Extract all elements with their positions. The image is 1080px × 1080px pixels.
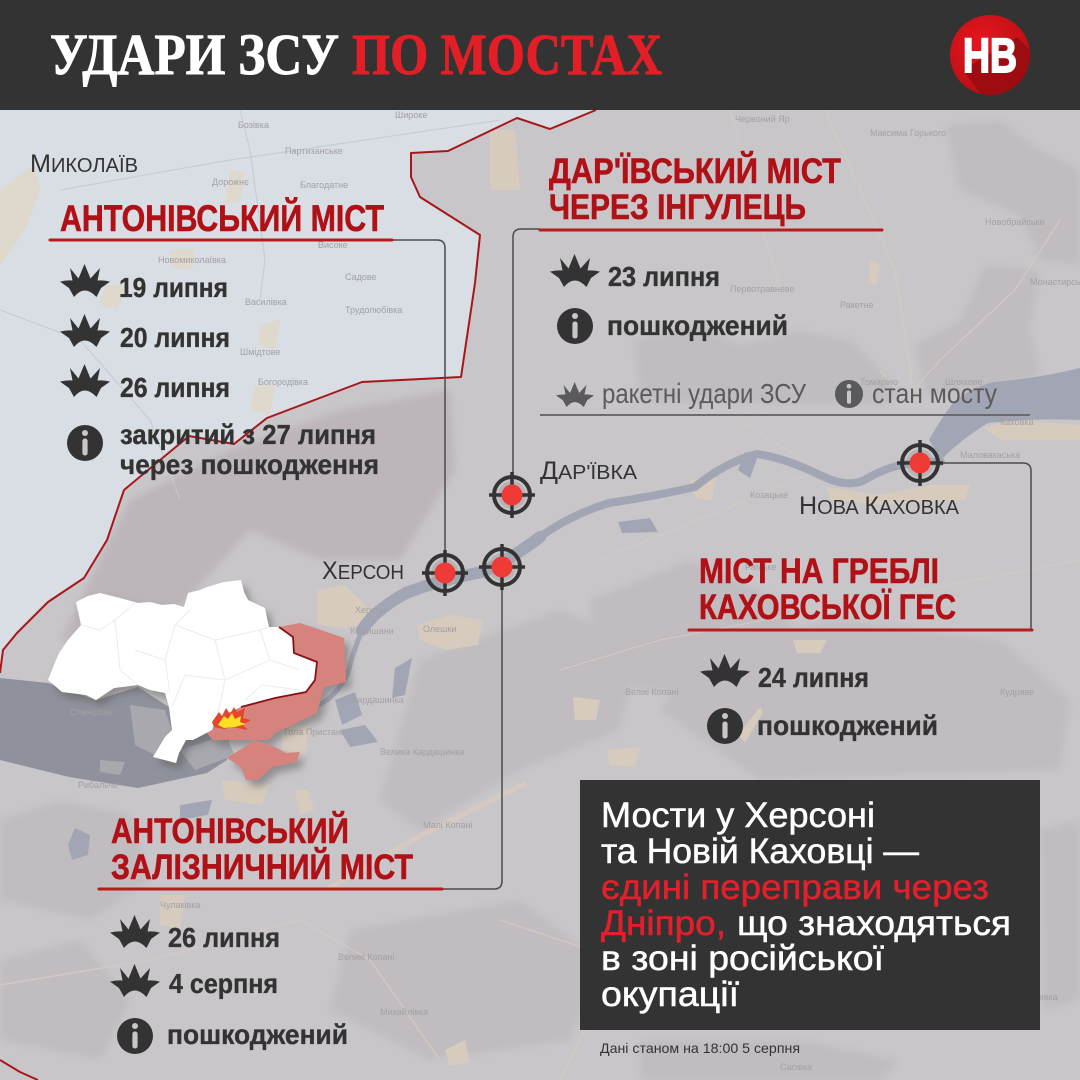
heading: КАХОВСЬКОЇ ГЕС	[699, 588, 956, 627]
map background: Великі Копані	[338, 952, 395, 962]
frontline on inset	[241, 627, 317, 707]
map background: Богородівка	[258, 377, 308, 387]
map background: Велікі Копані	[625, 687, 678, 697]
panel: Darivka bridge: 23 липня	[608, 261, 720, 292]
map background: Каховка	[1000, 417, 1034, 427]
callout: Дніпро,	[601, 904, 726, 943]
map background: Василівка	[245, 297, 287, 307]
map background: Шляхове	[945, 377, 982, 387]
map background: Комишани	[350, 626, 394, 636]
heading: АНТОНІВСЬКИЙ МІСТ	[60, 197, 384, 239]
callout: єдині переправи через	[601, 868, 989, 907]
map background: Олешки	[423, 624, 456, 634]
callout: в зоні російської	[601, 939, 884, 978]
heading	[699, 552, 956, 627]
panel: Darivka bridge	[540, 151, 882, 344]
map background: Чулаківка	[160, 900, 200, 910]
map background: Партизанське	[285, 146, 343, 156]
panel: Kakhovka dam bridge	[689, 552, 1032, 744]
map background: Кардашинка	[352, 695, 404, 705]
map background: Ракетне	[840, 300, 874, 310]
map background: Томаріно	[860, 377, 898, 387]
map background: Маловакаська	[960, 450, 1020, 460]
callout: Мости у Херсоні	[601, 796, 875, 835]
city labels: НОВА КАХОВКА	[799, 492, 960, 520]
city labels	[30, 150, 960, 585]
map background: Новобрайське	[985, 217, 1045, 227]
heading: ЗАЛІЗНИЧНИЙ МІСТ	[111, 847, 413, 887]
map background: Максима Горького	[870, 128, 946, 138]
map background: Новомиколаївка	[158, 255, 226, 265]
map background: Раїське	[745, 562, 776, 572]
map background: Херсон	[355, 605, 386, 615]
panel: Kakhovka dam bridge: 24 липня	[758, 662, 869, 693]
map background: Михайлівка	[380, 1007, 428, 1017]
panel: Antonivskyi rail bridge: 4 серпня	[169, 968, 278, 999]
legend: стан мосту	[872, 378, 997, 409]
map background: Благодатне	[300, 180, 348, 190]
title	[50, 22, 662, 87]
map background: Малі Копані	[423, 820, 472, 830]
panel: Antonivskyi rail bridge	[99, 811, 442, 1054]
map background: Гола Пристань	[284, 727, 346, 737]
panel: Antonivskyi bridge: 19 липня	[119, 272, 228, 303]
city labels: ХЕРСОН	[322, 557, 404, 585]
map background: Первотравневе	[730, 284, 795, 294]
leader lines	[392, 229, 1031, 889]
water: Dnipro-Bug liman	[0, 678, 230, 788]
map background: Бозівка	[238, 120, 269, 130]
city labels: МИКОЛАЇВ	[30, 150, 138, 178]
footnote: Дані станом на 18:00 5 серпня	[600, 1040, 800, 1056]
panel: Antonivskyi bridge: через пошкодження	[120, 449, 379, 480]
panel: Darivka bridge: пошкоджений	[607, 310, 788, 341]
panel: Antonivskyi rail bridge: 26 липня	[168, 922, 280, 953]
map background: Шмідтове	[240, 347, 280, 357]
callout	[580, 780, 1040, 1030]
header bar	[0, 0, 1080, 110]
legend	[540, 378, 1030, 415]
panel: Antonivskyi bridge: 20 липня	[120, 322, 230, 353]
callout: та Новій Каховці —	[601, 832, 919, 871]
water: Dnipro river	[290, 454, 941, 722]
panel: Antonivskyi bridge	[50, 197, 392, 480]
panel: Antonivskyi bridge: 26 липня	[120, 372, 230, 403]
heading: АНТОНІВСЬКИЙ	[111, 811, 349, 851]
map background: Дорожнє	[212, 177, 249, 187]
target markers	[422, 440, 943, 596]
heading: МІСТ НА ГРЕБЛІ	[699, 552, 939, 591]
legend: ракетні удари ЗСУ	[602, 378, 806, 409]
panel: Antonivskyi rail bridge: пошкоджений	[167, 1019, 348, 1050]
map background: Макарівка	[1015, 992, 1058, 1002]
title: ПО МОСТАХ	[352, 22, 662, 87]
map background: Кудряве	[1000, 687, 1034, 697]
title: УДАРИ ЗСУ	[50, 22, 339, 87]
free territory	[0, 110, 596, 673]
map background: Широке	[395, 110, 427, 120]
heading: ЧЕРЕЗ ІНГУЛЕЦЬ	[549, 188, 806, 227]
frontline border	[0, 110, 596, 1080]
map background: Велика Кардашинка	[380, 747, 464, 757]
explosion	[212, 707, 251, 730]
logo НВ: НВ	[963, 30, 1017, 83]
logo НВ	[950, 15, 1030, 95]
Crimea	[227, 740, 300, 780]
Ukraine free territory	[48, 580, 317, 763]
heading: ДАР'ЇВСЬКИЙ МІСТ	[549, 151, 841, 191]
water: Kakhovka reservoir	[929, 368, 1080, 460]
heading	[111, 811, 413, 887]
map background: Високе	[318, 240, 348, 250]
map background: Трудолюбівка	[345, 305, 402, 315]
heading	[549, 151, 841, 227]
occupied territory on inset	[207, 623, 346, 740]
callout: окупації	[601, 975, 739, 1014]
map background: Станіслав	[70, 707, 112, 717]
callout: що знаходяться	[737, 904, 1011, 943]
map inset: Ukraine	[48, 580, 346, 780]
panel: Kakhovka dam bridge: пошкоджений	[757, 710, 938, 741]
map background: Козацьке	[750, 490, 788, 500]
map background: Садове	[345, 272, 377, 282]
map background: Червоний Яр	[735, 114, 790, 124]
panel: Antonivskyi bridge: закритий з 27 липня	[120, 419, 376, 450]
city labels: ДАР'ЇВКА	[540, 457, 638, 485]
map background: Рибальче	[78, 780, 118, 790]
map background: Сасівка	[780, 1062, 812, 1072]
